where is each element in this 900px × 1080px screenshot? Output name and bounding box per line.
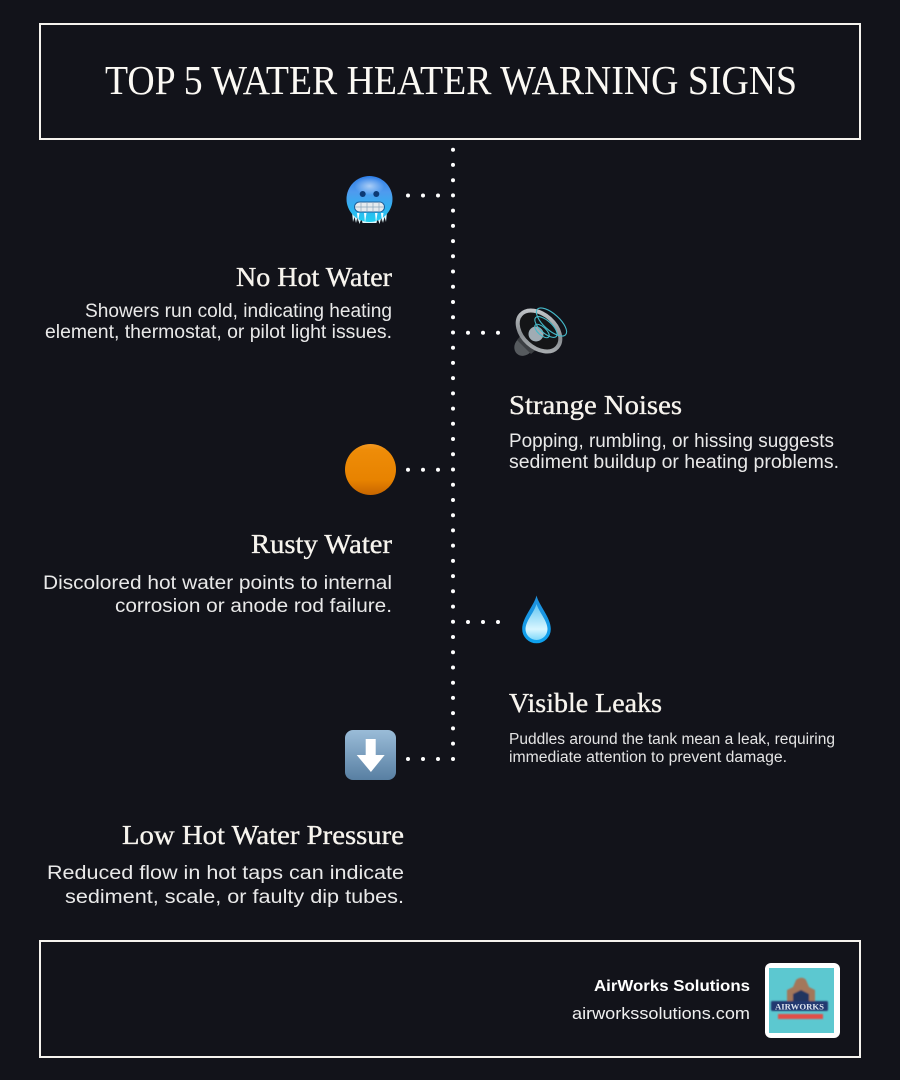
text block: visible leaks: Puddles around the tank mean a leak, requiring (509, 731, 835, 748)
logo (765, 963, 840, 1038)
footer panel (40, 941, 860, 1057)
text block: strange noises: Strange Noises (509, 390, 682, 420)
text block: rusty water: corrosion or anode rod failure. (115, 596, 392, 617)
icon: freezing face (346, 176, 392, 224)
text block: rusty water: Rusty Water (251, 529, 392, 559)
connector dots: visible leaks (466, 620, 500, 624)
text block: strange noises: Popping, rumbling, or hissing suggests (509, 431, 834, 452)
text block: low hot water pressure: Reduced flow in hot taps can indicate (47, 863, 404, 884)
text block: no hot water: element, thermostat, or pilot light issues. (45, 322, 392, 343)
text block: visible leaks: immediate attention to prevent damage. (509, 749, 787, 766)
text block: visible leaks (509, 688, 835, 766)
text block: rusty water (43, 529, 392, 617)
text block: visible leaks: Visible Leaks (509, 688, 662, 718)
title panel (40, 24, 860, 139)
icon: speaker (510, 302, 571, 360)
text block: low hot water pressure (47, 820, 404, 908)
icon: water drop (522, 596, 551, 643)
connector dots: no hot water (406, 194, 440, 198)
text block: low hot water pressure: sediment, scale, or faulty dip tubes. (65, 887, 404, 908)
dotted timeline (451, 148, 455, 761)
text block: no hot water (45, 262, 392, 343)
icon: orange circle (345, 444, 396, 495)
text block: no hot water: No Hot Water (236, 262, 392, 292)
text block: low hot water pressure: Low Hot Water Pressure (122, 820, 404, 850)
text block: rusty water: Discolored hot water points to internal (43, 573, 392, 594)
text block: strange noises: sediment buildup or heating problems. (509, 452, 839, 473)
logo: AIRWORKS (775, 1002, 825, 1012)
website: airworkssolutions.com (572, 1004, 750, 1023)
text block: no hot water: Showers run cold, indicating heating (85, 301, 392, 322)
connector dots: rusty water (406, 468, 440, 472)
connector dots: low pressure (406, 757, 440, 761)
connector dots: strange noises (466, 331, 500, 335)
icon: down arrow (345, 730, 396, 780)
company name: AirWorks Solutions (594, 978, 750, 995)
title: TOP 5 WATER HEATER WARNING SIGNS (105, 57, 797, 103)
text block: strange noises (509, 390, 839, 473)
